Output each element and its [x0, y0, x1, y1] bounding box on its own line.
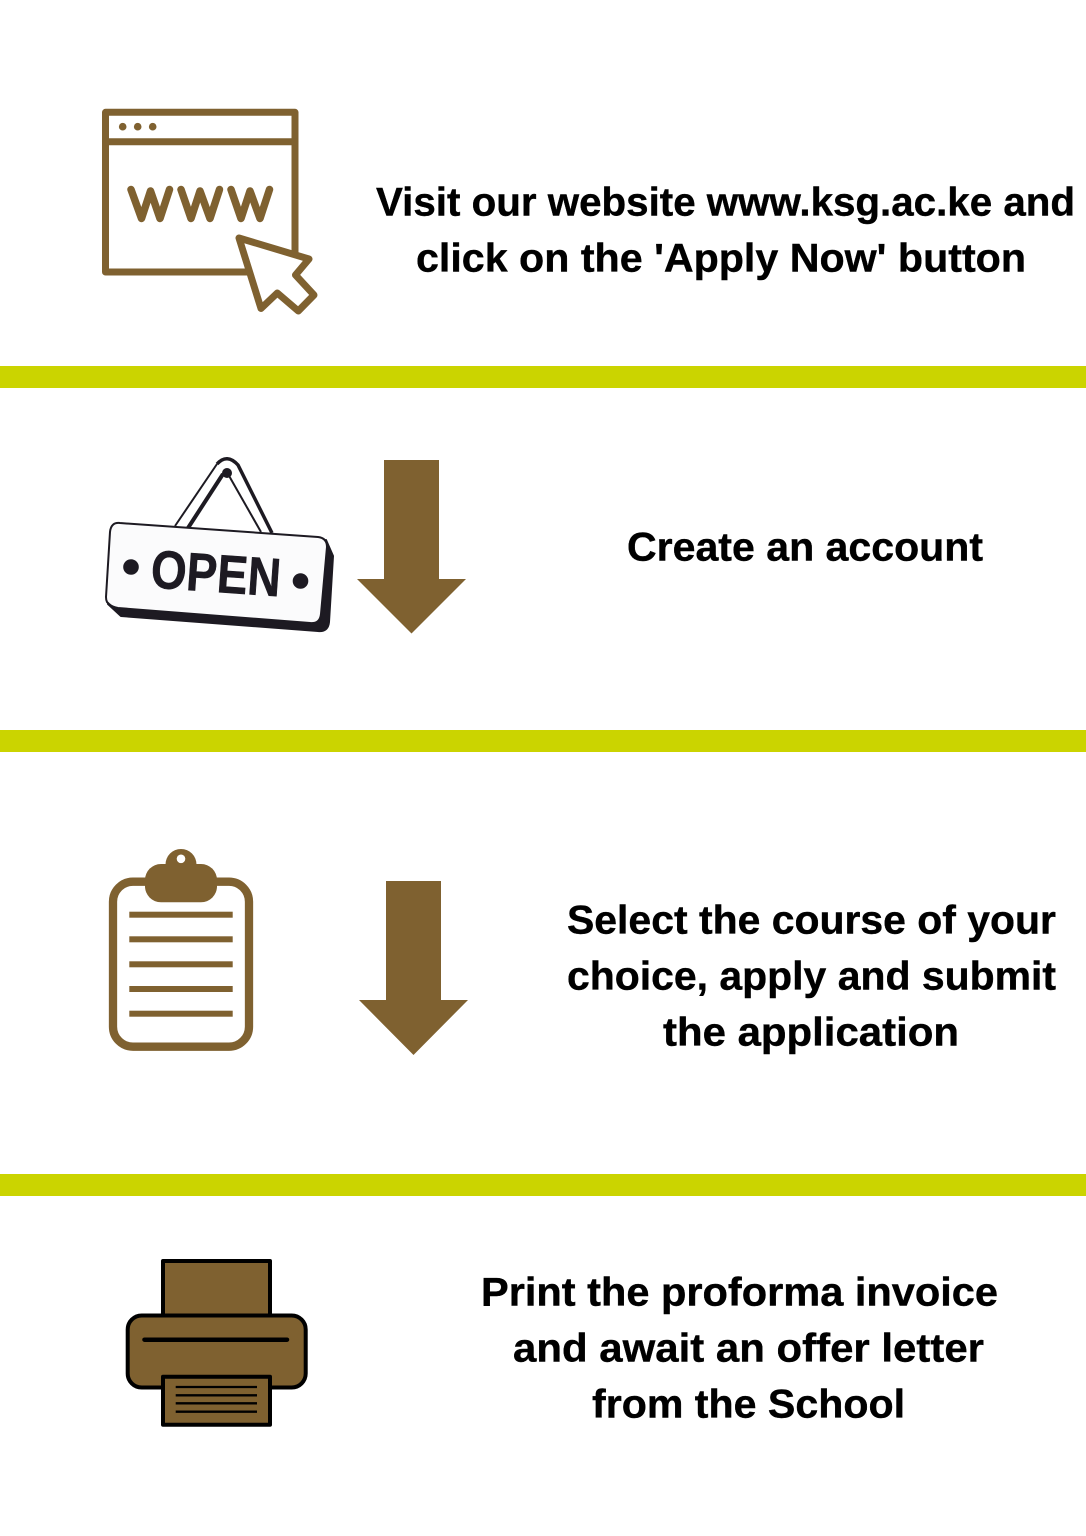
- panel: step 3 select course: [113, 849, 1056, 1055]
- text: step 4 instruction: and await an offer letter: [513, 1326, 984, 1370]
- text: step 2 instruction: Create an account: [627, 526, 983, 570]
- text: step 4 instruction: Print the proforma invoice: [481, 1270, 998, 1314]
- text: step 4 instruction: from the School: [592, 1382, 905, 1426]
- panel: step 1 visit website: [106, 112, 1075, 311]
- icon: clipboard: [113, 849, 249, 1047]
- panel: step 4 print invoice: [128, 1261, 998, 1426]
- arrow: down to step 2 text: [357, 460, 466, 634]
- text: step 3 instruction: the application: [663, 1010, 959, 1054]
- icon: hanging open sign: [106, 459, 333, 631]
- text: step 3 instruction: choice, apply and submit: [567, 954, 1056, 998]
- icon: browser window with www and cursor: [106, 112, 314, 311]
- text: step 3 instruction: [567, 898, 1056, 1054]
- panel: step 2 create account: [106, 459, 983, 634]
- text: step 1 instruction: [376, 180, 1075, 280]
- icon: printer: [128, 1261, 306, 1425]
- text: step 3 instruction: Select the course of your: [567, 898, 1056, 942]
- icon: hanging open sign: OPEN: [149, 540, 283, 608]
- arrow: down to step 3 text: [359, 881, 468, 1055]
- text: step 4 instruction: [481, 1270, 998, 1426]
- text: step 1 instruction: click on the 'Apply Now' button: [416, 236, 1026, 280]
- text: step 1 instruction: Visit our website www.ksg.ac.ke and: [376, 180, 1075, 224]
